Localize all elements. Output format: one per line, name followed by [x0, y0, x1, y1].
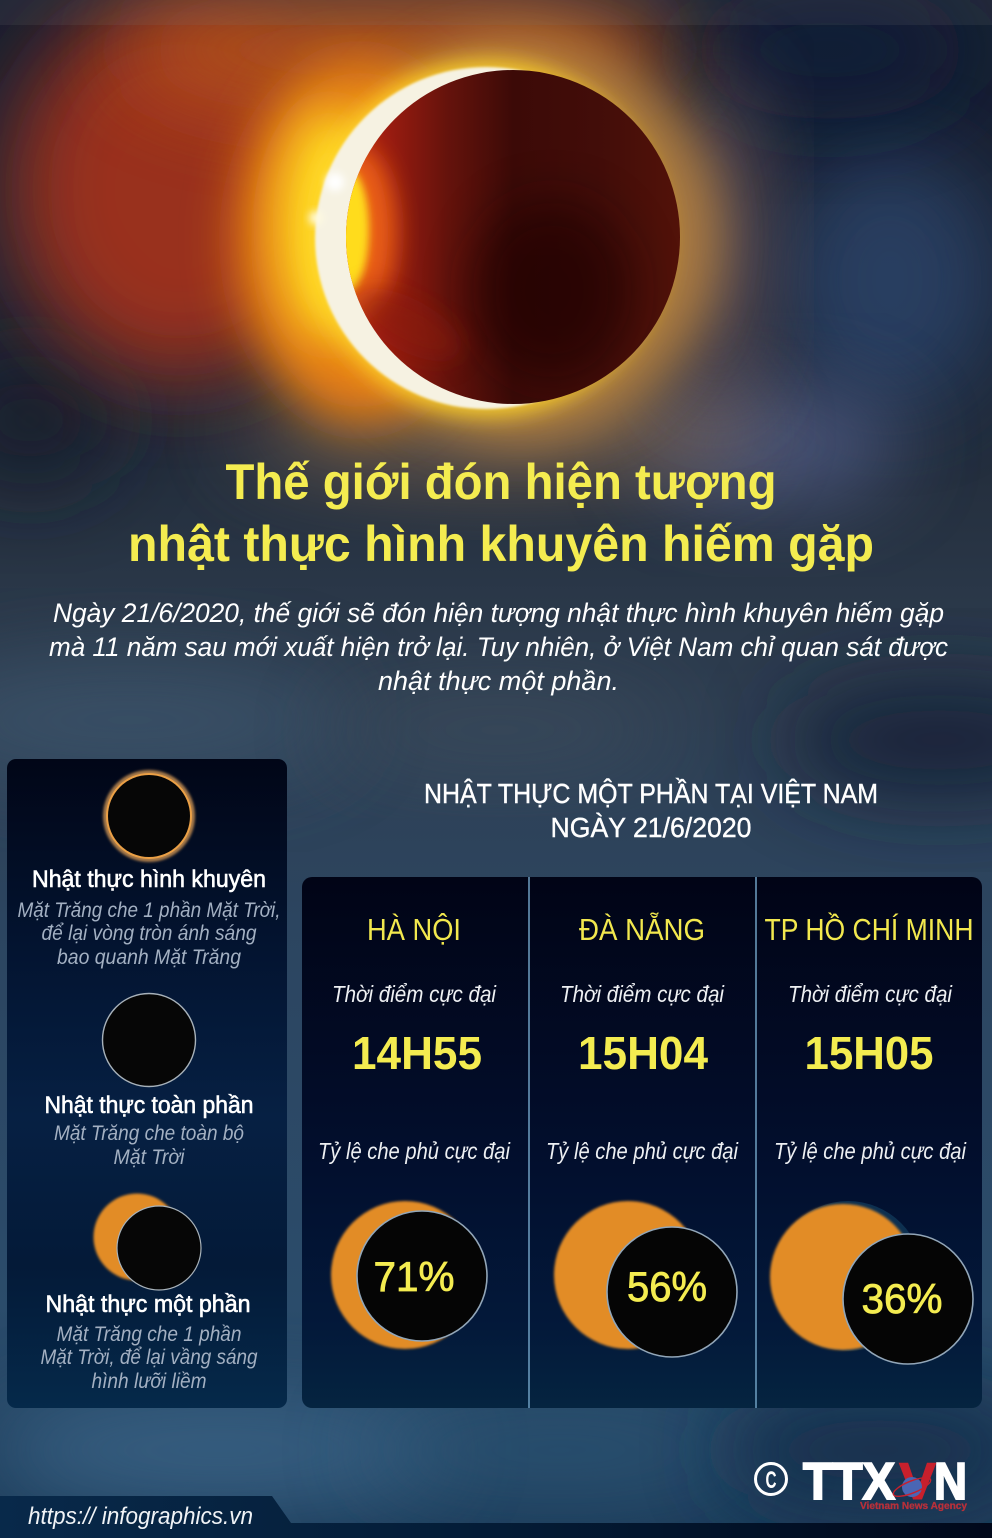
title: nhật thực hình khuyên hiếm gặp	[128, 516, 874, 572]
coverage label: Tỷ lệ che phủ cực đại	[318, 1138, 511, 1164]
panel: eclipse types	[7, 759, 287, 1408]
description: partial eclipse	[40, 1323, 258, 1393]
peak time: 14H55	[352, 1027, 482, 1079]
logo: TTXVN: Vietnam News Agency	[860, 1501, 967, 1512]
intro text: nhật thực một phần.	[378, 666, 619, 696]
icon: partial eclipse	[94, 1194, 201, 1290]
peak time label: Thời điểm cực đại	[332, 981, 497, 1007]
description: annular eclipse	[18, 899, 280, 969]
intro text: Ngày 21/6/2020, thế giới sẽ đón hiện tượng nhật thực hình khuyên hiếm gặp	[53, 598, 944, 628]
logo: TTXVN: TTX	[803, 1453, 895, 1511]
description: total eclipse: Mặt Trời	[114, 1146, 186, 1169]
eclipse photo	[10, 0, 760, 480]
title	[128, 454, 874, 572]
moon disc	[320, 70, 680, 404]
column: Ha Noi	[318, 912, 511, 1349]
description: partial eclipse: Mặt Trăng che 1 phần	[56, 1323, 242, 1346]
peak time label: Thời điểm cực đại	[788, 981, 953, 1007]
description: annular eclipse: Mặt Trăng che 1 phần Mặt Trời,	[18, 899, 280, 922]
logo: TTXVN: N	[934, 1453, 967, 1511]
icon: total eclipse	[102, 994, 196, 1086]
copyright symbol: C	[766, 1467, 776, 1494]
description: total eclipse: Mặt Trăng che toàn bộ	[54, 1122, 244, 1145]
description: total eclipse	[54, 1122, 244, 1169]
peak time: 15H04	[578, 1027, 708, 1079]
logo: TTXVN	[803, 1453, 967, 1512]
logo: red V and globe: V	[899, 1453, 936, 1511]
coverage graphic 71%	[331, 1201, 487, 1349]
heading: total eclipse: Nhật thực toàn phần	[44, 1092, 254, 1119]
panel: cities table	[302, 877, 982, 1408]
heading: partial eclipse in Vietnam: NHẬT THỰC MỘT PHẦN TẠI VIỆT NAM	[424, 778, 878, 809]
description: partial eclipse: Mặt Trời, để lại vầng sáng	[40, 1346, 258, 1369]
coverage graphic 36%: 36%	[862, 1275, 942, 1322]
heading: partial eclipse in Vietnam	[424, 778, 878, 843]
heading: partial eclipse: Nhật thực một phần	[46, 1291, 250, 1318]
coverage label: Tỷ lệ che phủ cực đại	[546, 1138, 739, 1164]
peak time label: Thời điểm cực đại	[560, 981, 725, 1007]
top band	[0, 0, 992, 25]
coverage graphic 56%	[554, 1201, 737, 1357]
coverage graphic 56%: 56%	[627, 1263, 707, 1310]
coverage graphic 71%: 71%	[374, 1253, 454, 1300]
corona glow	[10, 0, 760, 480]
icon: annular eclipse	[103, 770, 195, 862]
heading: partial eclipse in Vietnam: NGÀY 21/6/2020	[550, 812, 752, 843]
crescent of sunlight	[309, 61, 663, 415]
coverage label: Tỷ lệ che phủ cực đại	[774, 1138, 967, 1164]
intro text: mà 11 năm sau mới xuất hiện trở lại. Tuy nhiên, ở Việt Nam chỉ quan sát được	[49, 632, 948, 662]
footer band	[0, 1496, 992, 1538]
footer url: https:// infographics.vn	[28, 1503, 253, 1530]
title: Thế giới đón hiện tượng	[226, 454, 776, 510]
city name: HÀ NỘI	[367, 912, 461, 947]
heading: annular eclipse: Nhật thực hình khuyên	[32, 866, 266, 893]
intro text	[49, 598, 948, 696]
column: Da Nang	[546, 911, 739, 1357]
description: annular eclipse: bao quanh Mặt Trăng	[57, 946, 241, 969]
column: Ho Chi Minh City	[764, 911, 974, 1364]
city name: ĐÀ NẴNG	[579, 911, 705, 947]
coverage graphic 36%	[770, 1201, 973, 1364]
peak time: 15H05	[804, 1027, 934, 1079]
description: partial eclipse: hình lưỡi liềm	[92, 1370, 206, 1393]
description: annular eclipse: để lại vòng tròn ánh sáng	[42, 922, 257, 945]
copyright symbol	[756, 1464, 786, 1494]
